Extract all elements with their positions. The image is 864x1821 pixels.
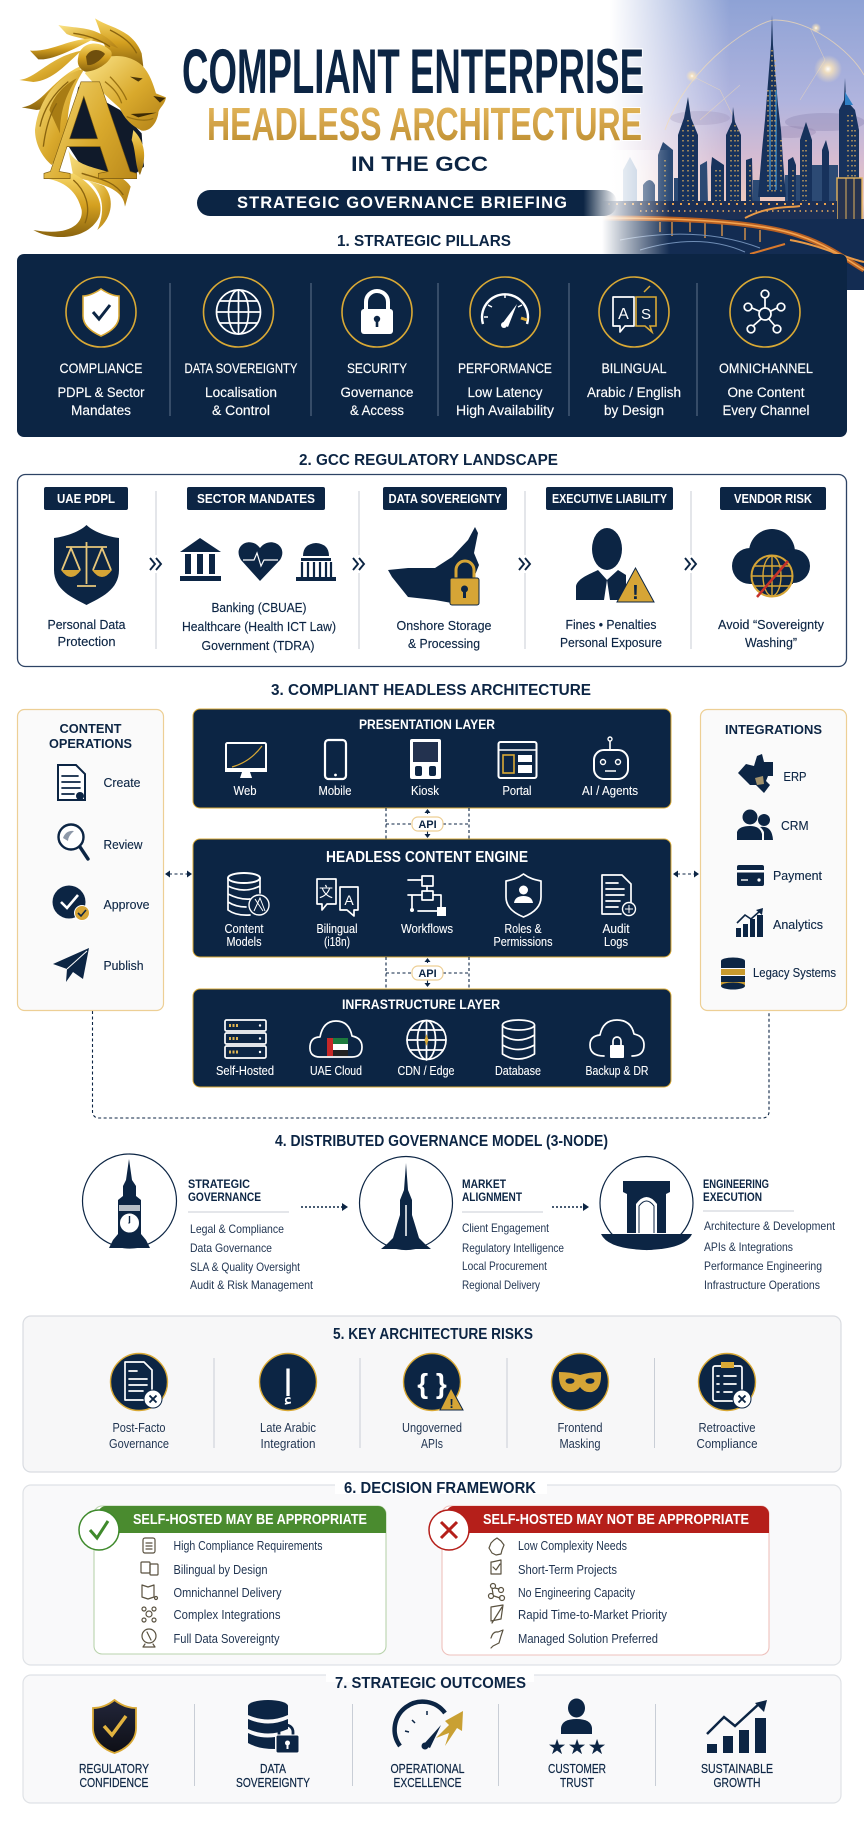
panel: headless content engine: [193, 839, 671, 957]
outcome: regulatory confidence: [79, 1700, 150, 1790]
pillar: performance: [456, 277, 554, 418]
pillar: bilingual: Arabic / English: [587, 385, 681, 400]
logo letter A: A: [43, 48, 138, 211]
arrow: market to engineering: [552, 1203, 589, 1211]
risk: retroactive compliance: [696, 1354, 758, 1451]
outcome: data sovereignty: SOVEREIGNTY: [236, 1776, 311, 1790]
column: sector mandates: Banking (CBUAE): [212, 600, 306, 615]
node: engineering execution: Architecture & Development: [704, 1219, 836, 1233]
icon: roles: Roles &: [504, 922, 542, 936]
panel: strategic outcomes: 7. STRATEGIC OUTCOMES: [335, 1675, 526, 1692]
icon: content models: [224, 873, 269, 949]
panel: key architecture risks: [23, 1316, 841, 1472]
column: executive liability: !: [632, 582, 639, 604]
arrows between columns: [148, 555, 699, 573]
heading: 4. distributed governance model: 4. DISTRIBUTED GOVERNANCE MODEL (3-NODE): [275, 1133, 608, 1150]
panel: presentation layer: PRESENTATION LAYER: [359, 717, 495, 732]
panel: decision framework: [23, 1480, 841, 1665]
subtitle pill: [197, 190, 617, 216]
item: payment: [737, 865, 823, 886]
panel: content operations: [18, 710, 164, 1010]
node: engineering execution: Performance Engineering: [704, 1259, 822, 1273]
risk: ungoverned apis: [402, 1354, 463, 1451]
risk: late arabic integration: ﺇ: [283, 1364, 293, 1405]
column: data sovereignty: DATA SOVEREIGNTY: [388, 492, 502, 506]
item: erp: [738, 754, 806, 793]
pillar: security: [340, 277, 414, 418]
pillar: omnichannel: [719, 277, 813, 418]
pillar: compliance: COMPLIANCE: [60, 361, 142, 376]
column: sector mandates: [180, 487, 336, 653]
icon: ai agents: [582, 737, 638, 798]
card: self-hosted may be appropriate: Complex Integrations: [174, 1608, 280, 1622]
pillar: security: & Access: [350, 403, 404, 418]
icon: audit logs: Audit: [602, 922, 630, 936]
column: uae pdpl: Personal Data: [48, 617, 126, 632]
icon: web: Web: [234, 784, 257, 798]
node: strategic governance: GOVERNANCE: [188, 1192, 261, 1204]
item: legacy systems: Legacy Systems: [753, 966, 836, 980]
node: market alignment: ALIGNMENT: [462, 1192, 522, 1204]
outcome: data sovereignty: DATA: [260, 1762, 287, 1776]
step: publish: [53, 948, 144, 982]
outcome: customer trust: ★: [568, 1735, 586, 1759]
panel: integrations: INTEGRATIONS: [725, 722, 822, 737]
icon: bilingual: (i18n): [324, 935, 350, 949]
city skyline image: [580, 0, 864, 290]
item: crm: CRM: [781, 819, 808, 833]
step: review: [58, 824, 143, 859]
outcome: operational excellence: OPERATIONAL: [390, 1762, 465, 1776]
panel: content operations: OPERATIONS: [49, 736, 132, 751]
step: create: [58, 765, 141, 800]
node: strategic governance: Legal & Compliance: [190, 1222, 284, 1236]
column: sector mandates: Healthcare (Health ICT Law): [182, 619, 336, 634]
icon: web: [225, 743, 267, 798]
column: executive liability: EXECUTIVE LIABILITY: [552, 492, 668, 506]
icon: mobile: [318, 740, 352, 798]
icon: portal: Portal: [502, 784, 532, 798]
icon: workflows: [401, 876, 453, 936]
pillar: bilingual: by Design: [604, 403, 664, 418]
icon: audit logs: [602, 875, 636, 949]
icon: bilingual: Bilingual: [316, 922, 358, 936]
outcome: regulatory confidence: REGULATORY: [79, 1762, 150, 1776]
card: self-hosted may not be appropriate: SELF-HOSTED MAY NOT BE APPROPRIATE: [483, 1511, 749, 1528]
risk: retroactive compliance: Retroactive: [698, 1421, 756, 1435]
pillar: data sovereignty: [184, 277, 298, 418]
column: data sovereignty: Onshore Storage: [396, 618, 492, 633]
pillar: data sovereignty: & Control: [212, 403, 270, 418]
panel: headless content engine: HEADLESS CONTENT ENGINE: [326, 849, 528, 866]
card: self-hosted may be appropriate: Full Data Sovereignty: [174, 1632, 280, 1646]
card: self-hosted may not be appropriate: [429, 1506, 769, 1655]
icon: database: Database: [495, 1064, 541, 1078]
outcome: sustainable growth: SUSTAINABLE: [701, 1762, 773, 1776]
risk: retroactive compliance: Compliance: [696, 1437, 758, 1451]
node: market alignment: Client Engagement: [462, 1221, 550, 1235]
heading: 2. gcc regulatory landscape: 2. GCC REGULATORY LANDSCAPE: [299, 452, 558, 469]
column: uae pdpl: Protection: [58, 634, 116, 649]
icon: bilingual: 文: [319, 884, 333, 900]
icon: self-hosted: Self-Hosted: [216, 1064, 274, 1078]
outcome: customer trust: [548, 1698, 606, 1790]
column: vendor risk: Avoid “Sovereignty: [718, 617, 824, 632]
column: vendor risk: Washing”: [745, 635, 797, 650]
node: strategic governance: STRATEGIC: [188, 1179, 250, 1191]
step: approve: Approve: [104, 898, 150, 912]
subtitle pill: STRATEGIC GOVERNANCE BRIEFING: [237, 194, 567, 212]
risk: ungoverned apis: APIs: [421, 1437, 443, 1451]
icon: workflows: Workflows: [401, 922, 453, 936]
pillar: compliance: PDPL & Sector: [58, 385, 145, 400]
node: market alignment: MARKET: [462, 1179, 506, 1191]
pillar: data sovereignty: Localisation: [205, 385, 277, 400]
node: strategic governance: SLA & Quality Oversight: [190, 1260, 301, 1274]
node: market alignment: Local Procurement: [462, 1259, 548, 1273]
outcome: operational excellence: EXCELLENCE: [394, 1776, 462, 1790]
column: data sovereignty: & Processing: [408, 636, 480, 651]
panel: regulatory landscape: [18, 474, 846, 666]
icon: content models: Models: [226, 935, 262, 949]
outcome: customer trust: ★: [548, 1735, 566, 1759]
step: publish: Publish: [104, 959, 144, 973]
column: data sovereignty: [383, 487, 507, 651]
pillar: performance: Low Latency: [468, 385, 543, 400]
icon: backup and dr: Backup & DR: [586, 1064, 648, 1078]
icon: roles: Permissions: [494, 935, 552, 949]
node: market alignment: Regional Delivery: [462, 1278, 540, 1292]
title: HEADLESS ARCHITECTURE: [207, 98, 642, 150]
icon: kiosk: [410, 739, 441, 798]
item: payment: Payment: [773, 869, 823, 883]
pillar: bilingual: [587, 277, 681, 418]
step: review: Review: [104, 838, 143, 852]
outcome: sustainable growth: [701, 1700, 773, 1790]
card: self-hosted may not be appropriate: Short-Term Projects: [518, 1563, 617, 1577]
panel: presentation layer: [193, 709, 671, 808]
icon: content models: Content: [224, 922, 264, 936]
icon: self-hosted: [216, 1020, 274, 1078]
risk: late arabic integration: [260, 1354, 316, 1451]
pillar: omnichannel: One Content: [728, 385, 805, 400]
pillar: data sovereignty: DATA SOVEREIGNTY: [184, 361, 298, 376]
step: approve: [52, 886, 150, 920]
risk: ungoverned apis: { }: [417, 1368, 447, 1399]
pillar: compliance: Mandates: [71, 403, 131, 418]
risk: post-facto governance: Governance: [109, 1437, 169, 1451]
icon: backup and dr: [586, 1020, 648, 1078]
icon: uae cloud: UAE Cloud: [310, 1064, 362, 1078]
risk: frontend masking: [552, 1354, 608, 1451]
panel: infrastructure layer: INFRASTRUCTURE LAYER: [342, 997, 500, 1012]
icon: portal: [498, 742, 536, 798]
column: executive liability: Fines • Penalties: [566, 617, 657, 632]
title: [182, 37, 644, 176]
node: engineering execution: APIs & Integrations: [704, 1240, 793, 1254]
risk: late arabic integration: Late Arabic: [260, 1421, 316, 1435]
card: self-hosted may be appropriate: Bilingual by Design: [174, 1563, 268, 1577]
node: engineering execution: ENGINEERING: [703, 1179, 769, 1191]
connector: api bottom: [386, 957, 469, 989]
icon: bilingual: A: [344, 892, 354, 908]
icon: kiosk: Kiosk: [411, 784, 440, 798]
pillar: performance: PERFORMANCE: [458, 361, 552, 376]
pillar: security: Governance: [340, 385, 414, 400]
icon: cdn edge: [398, 1020, 455, 1078]
panel: strategic outcomes: [23, 1670, 841, 1803]
node: market alignment: [360, 1156, 564, 1292]
icon: database: [495, 1020, 541, 1078]
risk: frontend masking: Frontend: [558, 1421, 603, 1435]
icon: bilingual: [316, 879, 358, 949]
icon: mobile: Mobile: [318, 784, 352, 798]
card: self-hosted may not be appropriate: Low Complexity Needs: [518, 1539, 627, 1553]
heading: 1. strategic pillars: 1. STRATEGIC PILLARS: [337, 233, 511, 250]
outcome: customer trust: ★: [588, 1735, 606, 1759]
node: strategic governance: Audit & Risk Management: [190, 1278, 314, 1292]
item: legacy systems: [721, 958, 836, 990]
column: executive liability: [546, 487, 673, 650]
step: create: Create: [104, 776, 141, 790]
icon: audit logs: Logs: [604, 935, 628, 949]
arrows: side connectors to engine: [165, 870, 699, 878]
pillar: omnichannel: Every Channel: [722, 403, 810, 418]
card: self-hosted may be appropriate: [79, 1506, 386, 1654]
column: vendor risk: [718, 487, 826, 650]
column: sector mandates: Government (TDRA): [202, 638, 314, 653]
panel: infrastructure layer: [193, 989, 671, 1087]
node: market alignment: Regulatory Intelligence: [462, 1241, 564, 1255]
item: analytics: [736, 908, 823, 937]
card: self-hosted may not be appropriate: Managed Solution Preferred: [518, 1632, 658, 1646]
risk: late arabic integration: Integration: [260, 1437, 316, 1451]
pillar: bilingual: A: [618, 306, 629, 323]
card: self-hosted may be appropriate: SELF-HOSTED MAY BE APPROPRIATE: [133, 1511, 367, 1528]
pillar: performance: High Availability: [456, 403, 554, 418]
logo: golden lion with letter A: [19, 18, 166, 237]
node: engineering execution: Infrastructure Operations: [704, 1278, 820, 1292]
connector: api bottom: API: [418, 968, 437, 980]
connector: dashed loop under layers: [92, 1011, 769, 1118]
item: analytics: Analytics: [773, 918, 823, 932]
risk: ungoverned apis: !: [449, 1396, 454, 1411]
pillar: bilingual: S: [641, 306, 651, 323]
card: self-hosted may not be appropriate: Rapid Time-to-Market Priority: [518, 1608, 668, 1622]
arrow: strategic to market: [301, 1203, 348, 1211]
outcome: customer trust: TRUST: [560, 1776, 594, 1790]
heading: 3. compliant headless architecture: 3. COMPLIANT HEADLESS ARCHITECTURE: [271, 682, 591, 699]
pillar: compliance: [58, 277, 145, 418]
outcome: regulatory confidence: CONFIDENCE: [80, 1776, 148, 1790]
panel: integrations: [700, 710, 846, 1010]
node: engineering execution: EXECUTION: [703, 1192, 762, 1204]
node: strategic governance: [82, 1154, 314, 1292]
connector: api top: [386, 808, 469, 839]
icon: ai agents: AI / Agents: [582, 784, 638, 798]
card: self-hosted may not be appropriate: No Engineering Capacity: [518, 1586, 636, 1600]
connector: api top: API: [418, 819, 437, 831]
node: strategic governance: Data Governance: [190, 1241, 272, 1255]
pillar: bilingual: BILINGUAL: [602, 361, 667, 376]
title: IN THE GCC: [351, 153, 488, 176]
icon: roles: [494, 874, 552, 949]
pillar: security: SECURITY: [347, 361, 407, 376]
card: self-hosted may be appropriate: Omnichannel Delivery: [174, 1586, 282, 1600]
pillar: omnichannel: OMNICHANNEL: [719, 361, 813, 376]
outcome: sustainable growth: GROWTH: [714, 1776, 760, 1790]
risk: post-facto governance: Post-Facto: [112, 1421, 166, 1435]
panel: strategic pillars: [17, 254, 847, 437]
column: sector mandates: SECTOR MANDATES: [197, 492, 315, 506]
risk: frontend masking: Masking: [560, 1437, 601, 1451]
outcome: data sovereignty: [236, 1700, 311, 1790]
icon: uae cloud: [310, 1021, 362, 1078]
outcome: customer trust: CUSTOMER: [548, 1762, 606, 1776]
panel: content operations: CONTENT: [60, 721, 122, 736]
panel: decision framework: 6. DECISION FRAMEWORK: [344, 1480, 537, 1497]
column: uae pdpl: UAE PDPL: [57, 492, 115, 506]
item: erp: ERP: [784, 770, 806, 784]
risk: post-facto governance: [109, 1354, 169, 1451]
column: vendor risk: VENDOR RISK: [734, 492, 812, 506]
card: self-hosted may be appropriate: High Compliance Requirements: [174, 1539, 322, 1553]
icon: cdn edge: CDN / Edge: [398, 1064, 455, 1078]
node: engineering execution: [600, 1156, 836, 1292]
column: uae pdpl: [44, 487, 128, 649]
column: executive liability: Personal Exposure: [560, 635, 662, 650]
risk: ungoverned apis: Ungoverned: [402, 1421, 462, 1435]
panel: key architecture risks: 5. KEY ARCHITECTURE RISKS: [333, 1326, 533, 1343]
outcome: operational excellence: [390, 1702, 465, 1790]
item: crm: [737, 810, 808, 840]
